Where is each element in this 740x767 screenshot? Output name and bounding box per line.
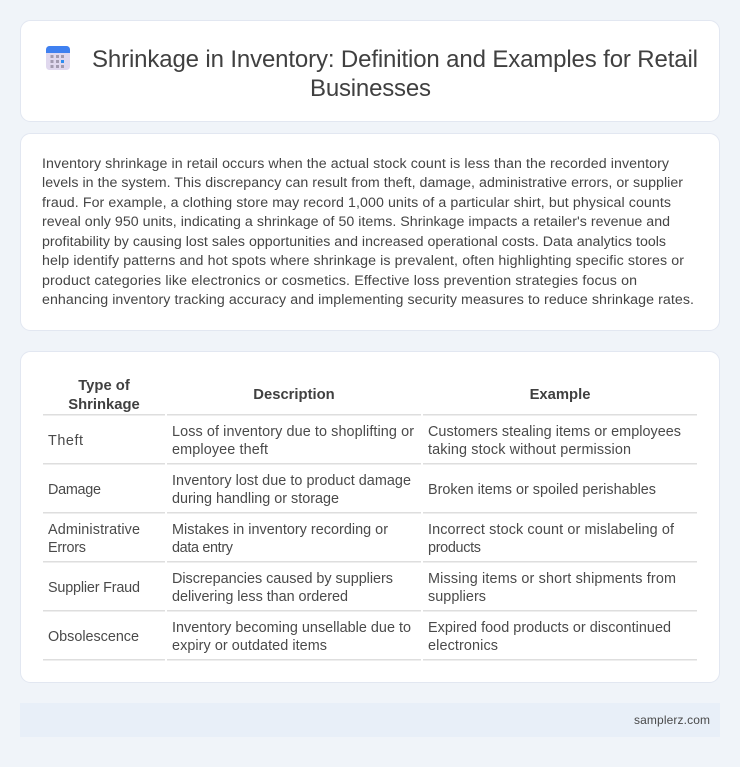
row: theft: Customers stealing items or employees [428,424,681,440]
table header: Example [530,387,590,403]
row: supplier fraud: delivering less than ordered [172,589,348,605]
row: supplier fraud: Missing items or short shipments from [428,571,676,587]
row: damage: Broken items or spoiled perishables [428,482,656,498]
row: administrative errors: products [428,540,481,556]
text block: paragraph: profitability by causing lost sales opportunities and increased operational costs. Data analytics tools [42,234,666,250]
table header: Shrinkage [68,397,140,413]
title: Businesses [310,75,431,102]
text block: paragraph: help identify patterns and hot spots where shrinkage is prevalent, often highlighting specific stores or [42,253,684,269]
footer: samplerz.com [634,713,710,727]
row: supplier fraud [48,571,676,605]
row: theft: employee theft [172,442,268,458]
row: obsolescence [48,620,671,654]
row: obsolescence: electronics [428,638,498,654]
text block: paragraph: enhancing inventory tracking accuracy and implementing security measures to reduce shrinkage rates. [42,292,694,308]
row: theft: Loss of inventory due to shoplifting or [172,424,414,440]
row: administrative errors: Incorrect stock count or mislabeling of [428,522,675,538]
icon: calendar [46,46,70,70]
text block: paragraph: Inventory shrinkage in retail occurs when the actual stock count is less than the recorded inventory [42,156,670,172]
row: administrative errors: Mistakes in inventory recording or [172,522,388,538]
row: supplier fraud: Supplier Fraud [48,580,140,596]
title: Shrinkage in Inventory: Definition and Examples for Retail [92,46,698,73]
panel: intro paragraph [20,134,720,330]
text block: paragraph: levels in the system. This discrepancy can result from theft, damage, administrative errors, or supplier [42,175,683,191]
text block: paragraph: fraud. For example, a clothing store may record 1,000 units of a particular shirt, but physical counts [42,195,671,211]
row: administrative errors: Administrative [48,522,140,538]
title [92,46,698,102]
row: supplier fraud: suppliers [428,589,486,605]
panel: shrinkage table [20,352,720,682]
table header: Description [253,387,335,403]
text block: paragraph: product categories like electronics or cosmetics. Effective loss prevention strategies focus on [42,273,637,289]
row: obsolescence: expiry or outdated items [172,638,327,654]
row: obsolescence: Inventory becoming unsellable due to [172,620,411,636]
panel: header [20,20,720,122]
row: obsolescence: Expired food products or discontinued [428,620,671,636]
footer [20,703,720,737]
row: administrative errors [48,522,675,556]
row: supplier fraud: Discrepancies caused by suppliers [172,571,393,587]
row: theft: Theft [48,433,83,449]
row: damage [48,473,656,507]
text block: paragraph [42,156,694,308]
row: obsolescence: Obsolescence [48,629,139,645]
row: theft: taking stock without permission [428,442,631,458]
row: administrative errors: data entry [172,540,234,556]
table header: Type of [78,378,130,394]
text block: paragraph: reveal only 950 units, indicating a shrinkage of 50 items. Shrinkage impacts a retailer's revenue and [42,214,670,230]
table header [68,378,590,413]
row: administrative errors: Errors [48,540,86,556]
row: theft [48,424,681,458]
row: damage: during handling or storage [172,491,339,507]
row: damage: Inventory lost due to product damage [172,473,411,489]
row: damage: Damage [48,482,101,498]
